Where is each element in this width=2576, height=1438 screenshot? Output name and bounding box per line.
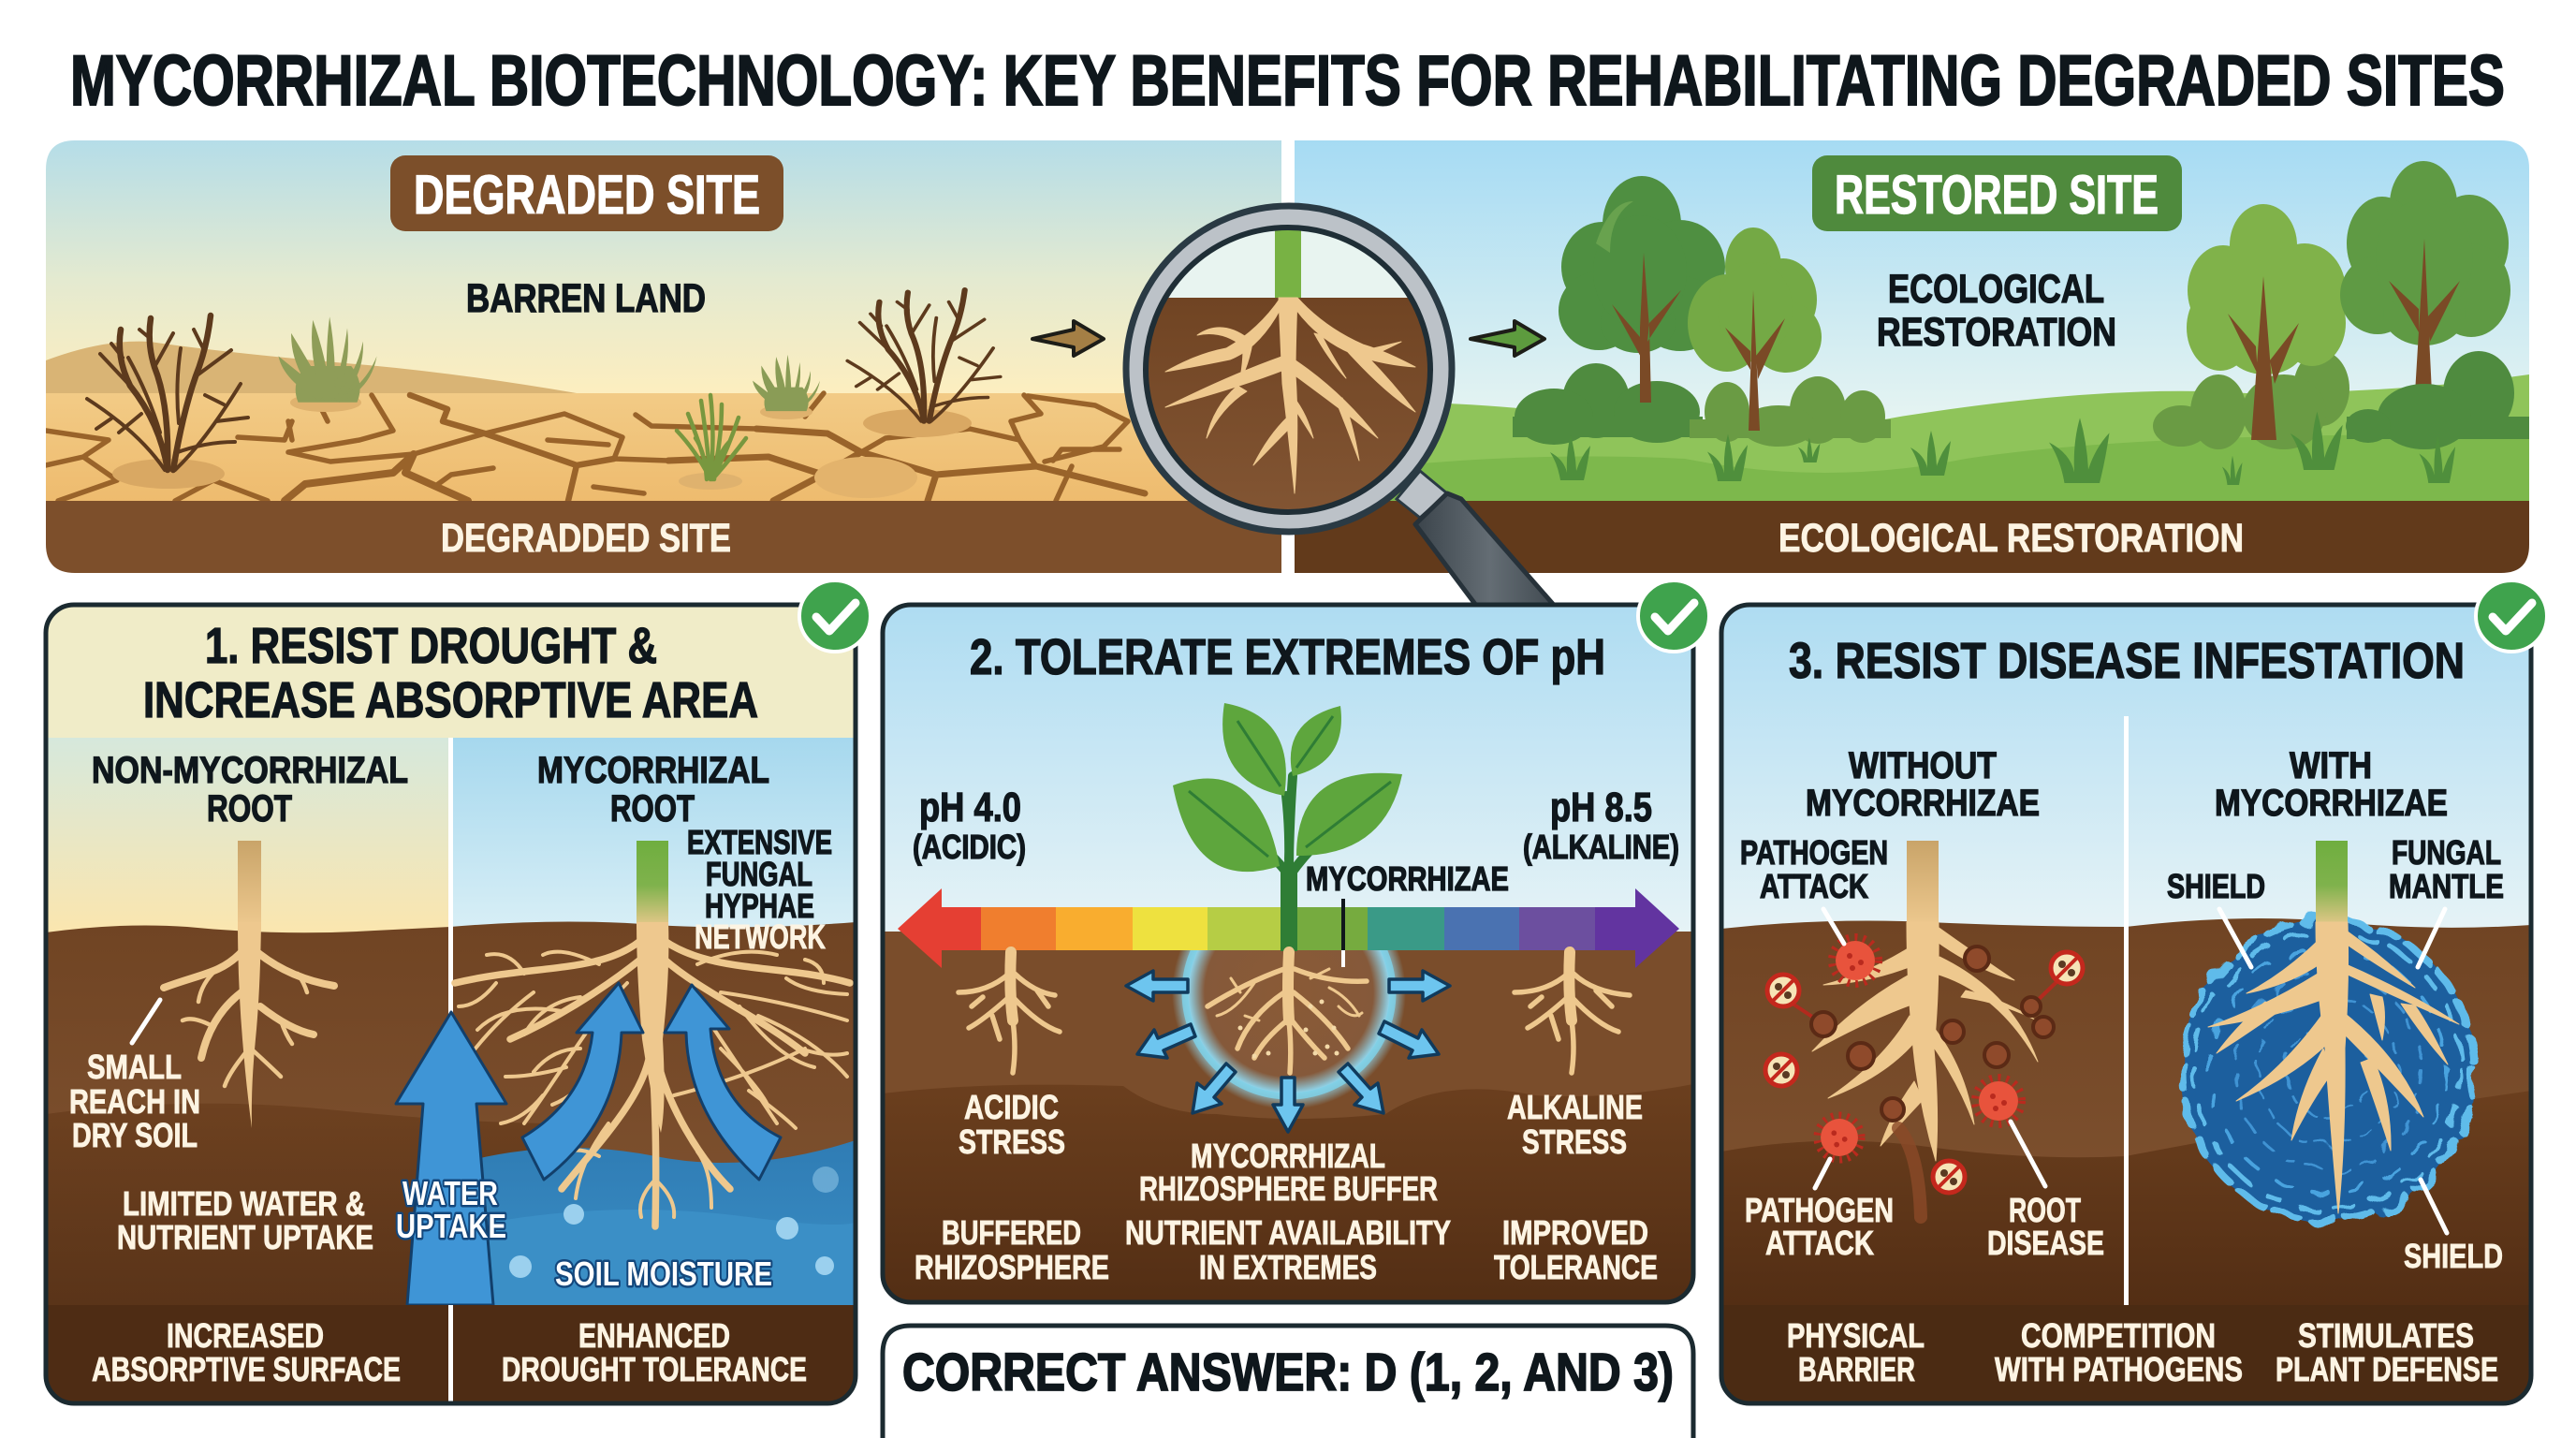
callout: correct answer (883, 1326, 1693, 1438)
badge: restored site (1812, 155, 2182, 231)
badge: restored site: RESTORED SITE (1835, 165, 2159, 226)
label: physical barrier: PHYSICAL (1787, 1316, 1925, 1355)
panel 1: resist drought (46, 605, 862, 1403)
label: with mycorrhizae: WITH (2290, 745, 2372, 786)
label: nutrient availability (1125, 1213, 1451, 1286)
sand mound (814, 457, 917, 498)
label: limited uptake (117, 1184, 373, 1256)
sky (1295, 140, 2530, 421)
label: pathogen attack bottom: PATHOGEN (1745, 1191, 1894, 1229)
label: mycorrhizae: MYCORRHIZAE (1306, 859, 1509, 898)
tree 1 (1559, 176, 1725, 403)
label: pathogen attack top: PATHOGEN (1740, 833, 1888, 872)
label: ecological restoration (1878, 273, 2115, 346)
panel: restored site scene (1295, 140, 2530, 573)
label: without mycorrhizae (1806, 745, 2040, 824)
viruses (1817, 937, 2022, 1160)
rhizosphere glow and buffer ring (1172, 875, 1406, 1109)
dead bush right (847, 290, 1001, 437)
label: stimulates plant defense: STIMULATES (2298, 1316, 2474, 1355)
label: small reach in dry soil: DRY SOIL (72, 1116, 198, 1154)
panel 1 outline (46, 605, 856, 1403)
label: alkaline stress: STRESS (1522, 1123, 1627, 1161)
label: ecological restoration: ECOLOGICAL (1888, 267, 2104, 312)
label: rhizosphere buffer: RHIZOSPHERE BUFFER (1139, 1169, 1438, 1208)
panel 2 outline (883, 605, 1693, 1302)
label: extensive fungal hyphae network: NETWORK (695, 917, 826, 956)
label: without mycorrhizae: WITHOUT (1849, 745, 1997, 786)
bottom band (46, 1305, 856, 1403)
callout lines right (2219, 909, 2447, 1233)
label: pathogen attack bottom: ATTACK (1765, 1224, 1874, 1262)
header background (46, 605, 856, 738)
pathogen spores (1811, 946, 2054, 1121)
heading 1: INCREASE ABSORPTIVE AREA (143, 672, 758, 728)
label: ph 4.0: pH 4.0 (919, 785, 1021, 830)
lens view (1146, 227, 1430, 513)
agave plant (279, 316, 376, 412)
label: nutrient availability: IN EXTREMES (1199, 1248, 1377, 1286)
badge: degraded site (390, 155, 783, 231)
label: mycorrhizal root: MYCORRHIZAL (537, 750, 769, 791)
alkaline root (1515, 952, 1630, 1073)
divider (2124, 716, 2129, 1305)
panel: degraded site scene (46, 140, 1281, 573)
label: small reach in dry soil: SMALL (87, 1048, 182, 1086)
soil cracks (46, 393, 1145, 501)
label: ph 4.0: (ACIDIC) (913, 828, 1026, 866)
label: limited uptake: NUTRIENT UPTAKE (117, 1218, 373, 1256)
label: competition with pathogens (1995, 1316, 2243, 1388)
label: extensive fungal hyphae network: FUNGAL (706, 855, 812, 893)
protected stem (2316, 841, 2348, 930)
label: barren land: BARREN LAND (466, 276, 706, 321)
label: non-mycorrhizal root (92, 750, 408, 829)
ph scale bar (898, 888, 1679, 968)
label: alkaline stress: ALKALINE (1507, 1088, 1643, 1126)
label: ecological restoration band: ECOLOGICAL RESTORATION (1778, 516, 2244, 561)
sky (883, 605, 1693, 932)
label: acidic stress: ACIDIC (964, 1088, 1059, 1126)
arrow: green (1471, 321, 1544, 356)
label: shield top: SHIELD (2167, 867, 2265, 905)
non-mycorrhizal root (164, 922, 334, 1128)
label: acidic stress: STRESS (959, 1123, 1065, 1161)
label: with mycorrhizae: MYCORRHIZAE (2215, 783, 2448, 824)
label: water uptake: WATER (402, 1174, 498, 1212)
callout: correct answer: CORRECT ANSWER: D (1, 2, AND 3) (902, 1343, 1674, 1402)
sky (1721, 605, 2531, 932)
label: physical barrier (1787, 1316, 1925, 1388)
label: ph 8.5 (1523, 785, 1679, 866)
soil band (46, 501, 1281, 573)
label: buffered rhizosphere: RHIZOSPHERE (915, 1248, 1109, 1286)
diseased root (1812, 922, 2038, 1161)
bushes back left (1513, 363, 1703, 445)
label: fungal mantle (2389, 833, 2504, 905)
heading 2: 2. TOLERATE EXTREMES OF pH (970, 629, 1605, 685)
arrow: brown (1032, 321, 1104, 356)
small agave (753, 355, 820, 419)
bush front right (2346, 351, 2529, 449)
label: acidic stress (959, 1088, 1065, 1161)
label: stimulates plant defense: PLANT DEFENSE (2276, 1350, 2498, 1388)
label: alkaline stress (1507, 1088, 1643, 1161)
label: root disease: DISEASE (1987, 1224, 2104, 1262)
label: improved tolerance: IMPROVED (1502, 1213, 1648, 1252)
label: improved tolerance: TOLERANCE (1494, 1248, 1658, 1286)
label: enhanced drought tolerance: DROUGHT TOLERANCE (502, 1350, 807, 1388)
extensive fungal root network (455, 922, 850, 1226)
label: small reach in dry soil (69, 1048, 200, 1154)
label: ph 4.0 (913, 785, 1026, 866)
left sky (46, 738, 450, 934)
label: physical barrier: BARRIER (1798, 1350, 1915, 1388)
lens rim (1146, 227, 1430, 512)
label: degradded site: DEGRADDED SITE (441, 516, 731, 561)
icon: check badge panel 1 (799, 580, 871, 652)
label: rhizosphere buffer: MYCORRHIZAL (1191, 1137, 1385, 1175)
lighter water band (468, 1208, 862, 1305)
speckled fungal spores (1237, 1000, 1339, 1058)
label: rhizosphere buffer (1139, 1137, 1438, 1208)
label: extensive fungal hyphae network: EXTENSIVE (687, 823, 832, 861)
panel 3: resist disease (1721, 605, 2531, 1403)
icon: check badge panel 3 (2476, 580, 2547, 652)
tree 2 (1688, 227, 1822, 431)
label: ph 8.5: (ALKALINE) (1523, 828, 1679, 866)
seedling plant (1173, 703, 1402, 951)
grass tufts (1550, 412, 2455, 485)
protected root (2208, 922, 2459, 1213)
pointer: mycorrhizae (1341, 899, 1345, 967)
label: pathogen attack top (1740, 833, 1888, 905)
label: non-mycorrhizal root: NON-MYCORRHIZAL (92, 750, 408, 791)
label: water uptake (396, 1174, 506, 1245)
soil (1721, 918, 2531, 1305)
divider (448, 738, 453, 1403)
label: pathogen attack top: ATTACK (1760, 867, 1868, 905)
soil (883, 932, 1693, 1302)
curved water arrow left (522, 983, 643, 1180)
blocked pathogen icons (1765, 952, 2083, 1193)
buffer arrows (1126, 971, 1450, 1132)
green grass clump (677, 395, 746, 490)
label: mycorrhizal root (537, 750, 769, 829)
mycorrhizal stem (637, 841, 668, 930)
label: extensive fungal hyphae network: HYPHAE (705, 887, 814, 925)
lower soil layer (46, 1104, 562, 1305)
label: buffered rhizosphere: BUFFERED (942, 1213, 1081, 1252)
handle (1397, 471, 1565, 618)
sky (46, 140, 1281, 395)
label: ecological restoration: RESTORATION (1877, 310, 2116, 355)
label: small reach in dry soil: REACH IN (69, 1082, 200, 1121)
label: nutrient availability: NUTRIENT AVAILABILITY (1125, 1213, 1451, 1252)
divider in band (448, 1305, 453, 1403)
heading 1: 1. RESIST DROUGHT & (205, 618, 657, 674)
label: enhanced drought tolerance: ENHANCED (578, 1316, 730, 1355)
label: mycorrhizal root: ROOT (610, 788, 695, 829)
label: water uptake: UPTAKE (396, 1207, 506, 1245)
label: stimulates plant defense (2276, 1316, 2498, 1388)
panel 2: tolerate ph extremes (883, 605, 1693, 1302)
label: ph 8.5: pH 8.5 (1550, 785, 1652, 830)
buffered root with hyphae (1208, 952, 1367, 1073)
tree 3 (2187, 204, 2346, 440)
non-mycorrhizal stem (238, 841, 261, 930)
acidic root (959, 952, 1060, 1073)
tree 4 (2340, 161, 2510, 393)
label: improved tolerance (1494, 1213, 1658, 1286)
lens ring (1126, 206, 1452, 532)
bushes right back (2153, 351, 2349, 449)
dead bush left (87, 315, 248, 489)
callout lines left (1815, 909, 2045, 1188)
label: non-mycorrhizal root: ROOT (207, 788, 292, 829)
diseased lesion streak (1898, 1128, 1921, 1217)
far hills (1426, 374, 2529, 473)
label: extensive fungal hyphae network (687, 823, 832, 956)
label: enhanced drought tolerance (502, 1316, 807, 1388)
label: fungal mantle: MANTLE (2389, 867, 2504, 905)
moisture bubbles (509, 1167, 839, 1278)
pathogen links (1793, 981, 2057, 1024)
label: shield bottom: SHIELD (2404, 1237, 2503, 1275)
cracked ground (46, 393, 1281, 502)
pointer line (132, 1000, 160, 1043)
bottom band (1721, 1305, 2531, 1403)
big water uptake arrow (396, 1012, 506, 1305)
lower soil layer (1721, 1091, 2531, 1305)
heading 1 (143, 618, 758, 728)
label: increased absorptive surface: ABSORPTIVE SURFACE (92, 1350, 401, 1388)
label: root disease: ROOT (2009, 1191, 2081, 1229)
soil band (1295, 501, 2530, 573)
curved water arrow right (665, 985, 781, 1180)
badge: degraded site: DEGRADED SITE (414, 165, 760, 226)
near meadow (1295, 434, 2529, 502)
label: pathogen attack bottom (1745, 1191, 1894, 1262)
right sky (450, 738, 856, 934)
label: increased absorptive surface: INCREASED (167, 1316, 324, 1355)
soil moisture zone (468, 1140, 856, 1305)
label: competition with pathogens: WITH PATHOGENS (1995, 1350, 2243, 1388)
label: buffered rhizosphere (915, 1213, 1109, 1286)
fungal mantle ball (2180, 918, 2476, 1224)
lower soil layer (883, 1084, 1693, 1302)
label: fungal mantle: FUNGAL (2392, 833, 2501, 872)
label: with mycorrhizae (2215, 745, 2448, 824)
icon: check badge panel 2 (1638, 580, 1709, 652)
label: root disease (1987, 1191, 2104, 1262)
panel 3 outline (1721, 605, 2531, 1403)
icon: magnifying glass over root (1126, 206, 1565, 618)
diseased stem (1907, 841, 1939, 930)
label: limited uptake: LIMITED WATER & (123, 1184, 365, 1223)
label: competition with pathogens: COMPETITION (2021, 1316, 2216, 1355)
bushes back middle (1690, 376, 1891, 447)
label: without mycorrhizae: MYCORRHIZAE (1806, 783, 2040, 824)
sand hill (46, 342, 577, 393)
label: increased absorptive surface (92, 1316, 401, 1388)
label: soil moisture: SOIL MOISTURE (555, 1255, 772, 1293)
soil (46, 921, 856, 1305)
